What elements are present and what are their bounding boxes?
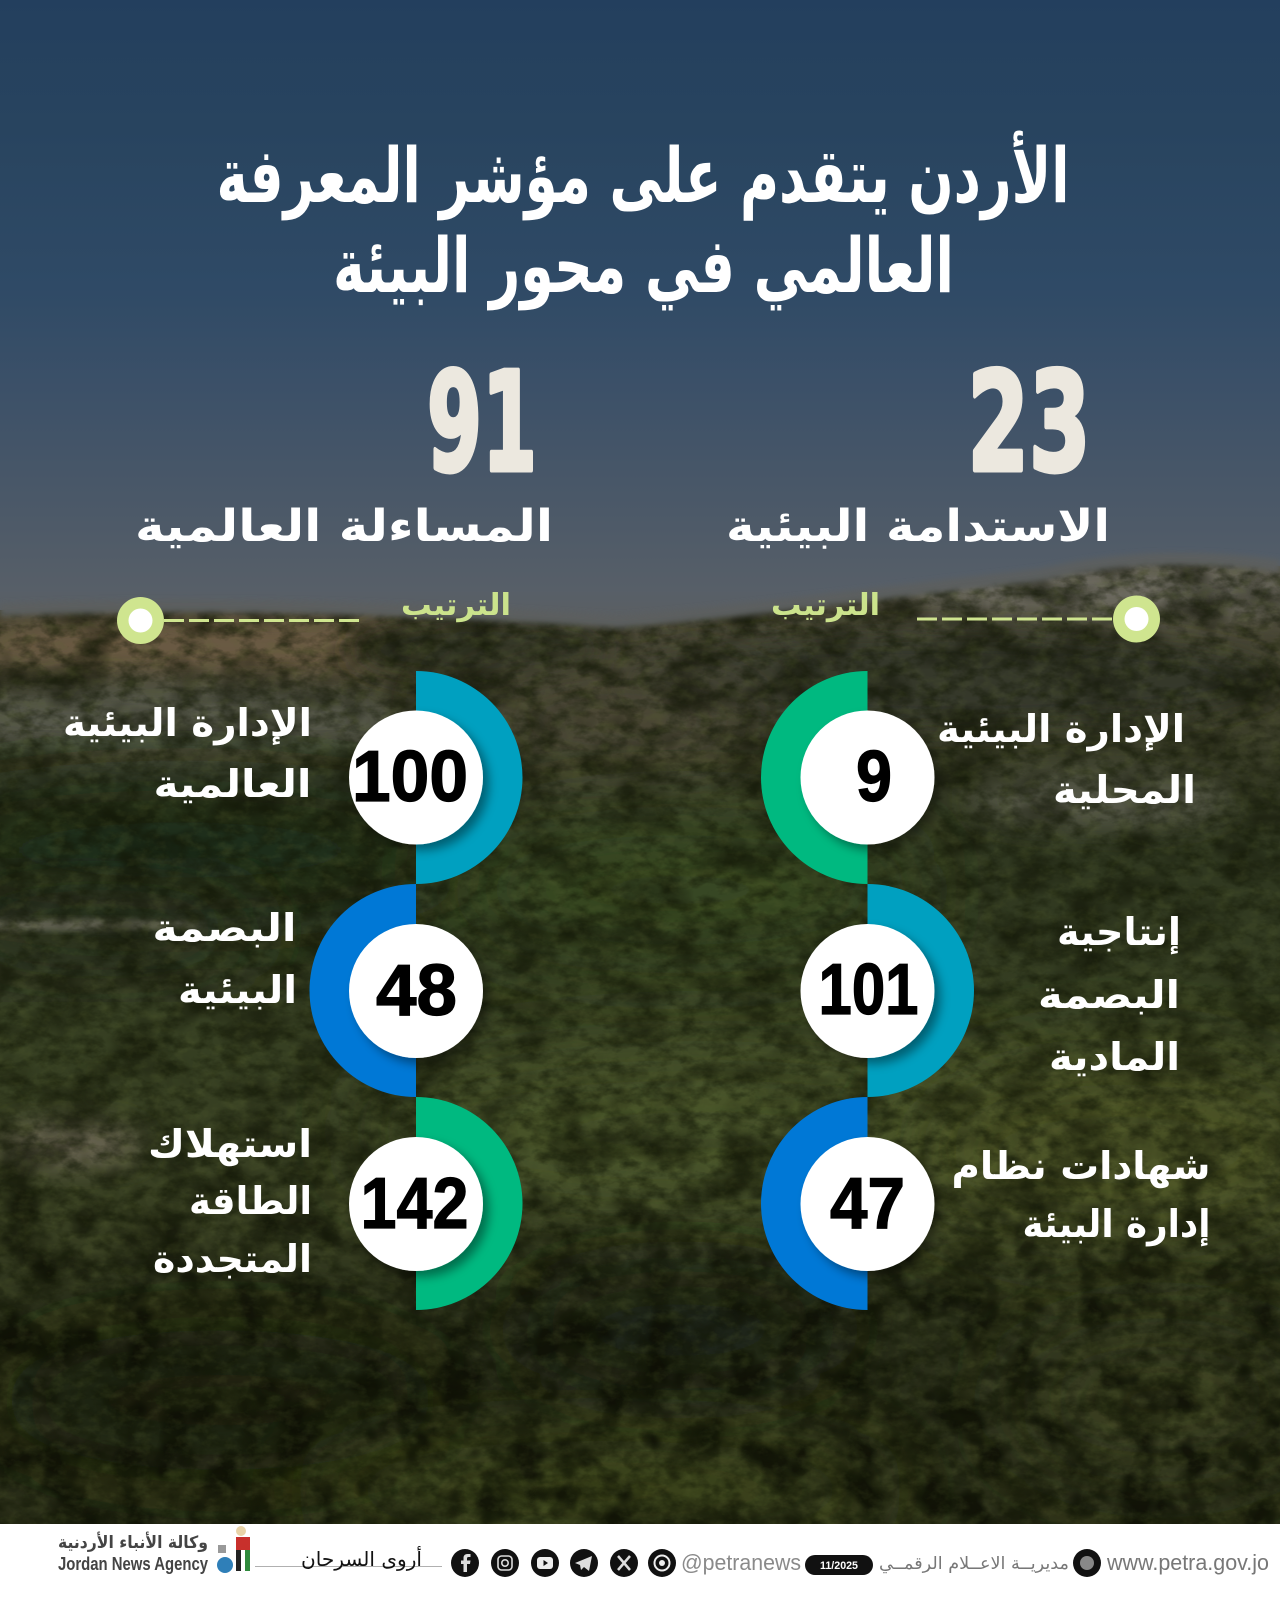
- metric: global environmental management 100: 100: [352, 737, 468, 817]
- metric: renewable energy consumption 142: المتجددة: [153, 1237, 312, 1281]
- metric: ecological footprint 48: 48: [376, 951, 457, 1031]
- agency name: Jordan News Agency: [58, 1554, 208, 1574]
- department name: مديريــة الاعــلام الرقمــي: [879, 1554, 1069, 1574]
- panel: left column metrics: [63, 671, 522, 1310]
- date badge: [805, 1555, 873, 1575]
- metric: global environmental management 100: العالمية: [154, 762, 312, 806]
- panel: global accountability header (left): [117, 344, 553, 644]
- metric: material footprint productivity 101: البصمة: [1038, 973, 1180, 1017]
- metric: local environmental management 9: الإدارة البيئية: [937, 707, 1185, 751]
- metric: material footprint productivity 101: [800, 884, 1181, 1097]
- heading: environmental sustainability: الاستدامة البيئية: [726, 501, 1110, 552]
- icon: youtube: [531, 1549, 559, 1577]
- metric: renewable energy consumption 142: استهلاك: [148, 1122, 312, 1166]
- designer credit with rule: أروى السرحان: [301, 1546, 422, 1571]
- metric: ecological footprint 48: البيئية: [178, 968, 297, 1012]
- metric: local environmental management 9: 9: [856, 737, 892, 817]
- date badge: 11/2025: [820, 1560, 858, 1572]
- social handle: @petranews: [681, 1550, 801, 1575]
- panel: right column metrics: [761, 671, 1210, 1310]
- metric: ecological footprint 48: البصمة: [152, 906, 296, 950]
- icons: social media: [451, 1549, 676, 1577]
- title: [216, 130, 1070, 311]
- rank number 23: 23: [968, 344, 1090, 503]
- rank label: الترتيب: [771, 588, 880, 623]
- icon: whatsapp: [648, 1549, 676, 1577]
- metric: ecological footprint 48: [152, 884, 483, 1097]
- metric: environmental management certificates 47: شهادات نظام: [952, 1144, 1210, 1189]
- icon: facebook: [451, 1549, 479, 1577]
- metric: renewable energy consumption 142: الطاقة: [189, 1179, 312, 1223]
- dashed connector with node: [917, 596, 1160, 642]
- metric: global environmental management 100: [63, 671, 522, 884]
- dashed connector with node: [117, 597, 361, 644]
- website url: www.petra.gov.jo: [1106, 1550, 1269, 1575]
- agency name: [58, 1532, 208, 1574]
- icon: instagram: [491, 1549, 519, 1577]
- icon: agency logo flag and globe: [217, 1526, 250, 1573]
- metric: material footprint productivity 101: 101: [818, 950, 918, 1030]
- icon: telegram: [570, 1549, 598, 1577]
- rank label: الترتيب: [401, 588, 511, 623]
- icon: x: [610, 1549, 638, 1577]
- metric: global environmental management 100: الإدارة البيئية: [63, 701, 312, 745]
- heading: global accountability: المساءلة العالمية: [135, 501, 553, 552]
- metric: material footprint productivity 101: إنتاجية: [1057, 910, 1181, 955]
- metric: local environmental management 9: المحلية: [1053, 768, 1196, 812]
- metric: material footprint productivity 101: المادية: [1049, 1035, 1180, 1079]
- metric: renewable energy consumption 142: 142: [360, 1164, 468, 1244]
- metric: environmental management certificates 47: [761, 1097, 1210, 1310]
- agency name: وكالة الأنباء الأردنية: [58, 1532, 208, 1553]
- panel: environmental sustainability header (right): [726, 344, 1160, 642]
- metric: renewable energy consumption 142: [148, 1097, 522, 1310]
- metric: environmental management certificates 47: 47: [830, 1164, 905, 1244]
- footer bar: [0, 1524, 1280, 1600]
- rank number 91: 91: [427, 344, 537, 503]
- icon: website globe: [1073, 1549, 1101, 1577]
- metric: local environmental management 9: [761, 671, 1196, 884]
- metric: environmental management certificates 47: إدارة البيئة: [1022, 1202, 1210, 1247]
- title: العالمي في محور البيئة: [333, 221, 954, 311]
